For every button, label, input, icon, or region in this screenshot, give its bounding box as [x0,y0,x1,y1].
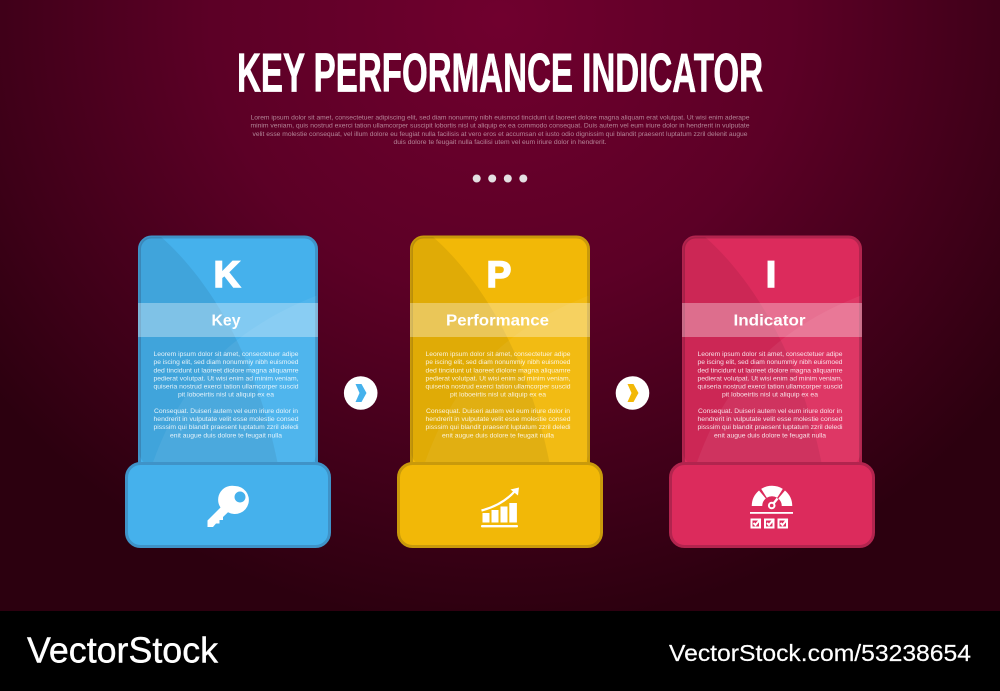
body text: pisssim qui blandit praesent luptatum zzril deledi [426,424,571,431]
card body yellow [412,237,588,477]
label band [410,303,590,337]
body text: quiseria nostrud exerci tation ullamcorper suscid [154,384,299,391]
body text: pedierat volutpat. Ut wisi enim ad minim veniam, [154,375,299,382]
body text: hendrerit in vulputate velit esse molestie consed [698,416,843,423]
body text: Leorem ipsum dolor sit amet, consectetuer adipe [698,351,843,358]
body text: hendrerit in vulputate velit esse molestie consed [426,416,571,423]
label Indicator: Indicator [734,312,806,330]
panel: K / Key [126,236,330,546]
card shading [138,236,318,465]
body text: ded tincidunt ut laoreet diolore magna aliquamre [426,367,571,374]
body text: hendrerit in vulputate velit esse molestie consed [154,416,299,423]
card body red [684,237,860,477]
arrow: key to performance [344,376,378,410]
intro text block: duis dolore te feugait nulla facilisi utem vel eum iriure dolor in hendrerit. [394,139,607,146]
body text: pisssim qui blandit praesent luptatum zzril deledi [154,424,299,431]
watermark bar [0,611,1000,691]
body text: pisssim qui blandit praesent luptatum zzril deledi [698,424,843,431]
letter I: I [766,254,776,295]
body text: enit augue duis dolore te feugait nulla [442,432,554,439]
icon: gauge with checkboxes [750,491,793,528]
panel: P / Performance [398,236,602,546]
body text: quiseria nostrud exerci tation ullamcorper suscid [426,384,571,391]
pagination dots [473,174,527,182]
icon: key [208,486,249,527]
intro text block: Lorem ipsum dolor sit amet, consectetuer adipiscing elit, sed diam nonummy nibh euismod tincidunt ut laoreet dolore magna aliquam erat volutpat. Ut wisi enim aderape [250,115,750,122]
watermark logo text: VectorStock [27,630,219,670]
label Key: Key [212,312,241,330]
icon box [398,464,602,546]
intro text block: velit esse molestie consequat, vel illum dolore eu feugiat nulla facilisis at vero eros et accumsan et iusto odio dignissim qui blandit praesent luptatum zzril delenit augue [252,131,748,138]
body text: pit loboeirtis nisl ut aliquip ex ea [450,392,546,399]
intro text block: minim veniam, quis nostrud exerci tation ullamcorper suscipit lobortis nisl ut aliquip ex ea commodo consequat. Duis autem vel eum iriure dolor in hendrerit in vulputate [250,123,750,130]
body text [698,351,843,439]
body text: pedierat volutpat. Ut wisi enim ad minim veniam, [698,375,843,382]
label band [682,303,862,337]
letter P: P [487,254,511,295]
body text: enit augue duis dolore te feugait nulla [714,432,826,439]
body text: enit augue duis dolore te feugait nulla [170,432,282,439]
icon: growth chart [481,488,519,527]
body text: ded tincidunt ut laoreet diolore magna aliquamre [154,367,299,374]
intro text block [250,115,750,146]
body text: Consequat. Duiseri autem vel eum iriure dolor in [154,408,298,415]
body text [426,351,571,439]
card shading [682,236,862,465]
body text: pe iscing elit, sed diam nonummiy nibh euismoed [426,359,571,366]
body text: Leorem ipsum dolor sit amet, consectetuer adipe [426,351,571,358]
body text: Consequat. Duiseri autem vel eum iriure dolor in [698,408,842,415]
watermark url text: VectorStock.com/53238654 [669,640,971,666]
body text: pit loboeirtis nisl ut aliquip ex ea [178,392,274,399]
body text: ded tincidunt ut laoreet diolore magna aliquamre [698,367,843,374]
body text: pe iscing elit, sed diam nonummiy nibh euismoed [154,359,299,366]
icon box [126,464,330,546]
letter K: K [214,254,241,295]
card body blue [140,237,316,477]
body text: Consequat. Duiseri autem vel eum iriure dolor in [426,408,570,415]
body text: pit loboeirtis nisl ut aliquip ex ea [722,392,818,399]
label band [138,303,318,337]
body text [154,351,299,439]
body text: Leorem ipsum dolor sit amet, consectetuer adipe [154,351,299,358]
panel: I / Indicator [670,236,874,546]
arrow: performance to indicator [616,376,649,410]
body text: pedierat volutpat. Ut wisi enim ad minim veniam, [426,375,571,382]
body text: quiseria nostrud exerci tation ullamcorper suscid [698,384,843,391]
body text: pe iscing elit, sed diam nonummiy nibh euismoed [698,359,843,366]
card shading [410,236,590,465]
label Performance: Performance [446,312,549,330]
icon box [670,464,874,546]
